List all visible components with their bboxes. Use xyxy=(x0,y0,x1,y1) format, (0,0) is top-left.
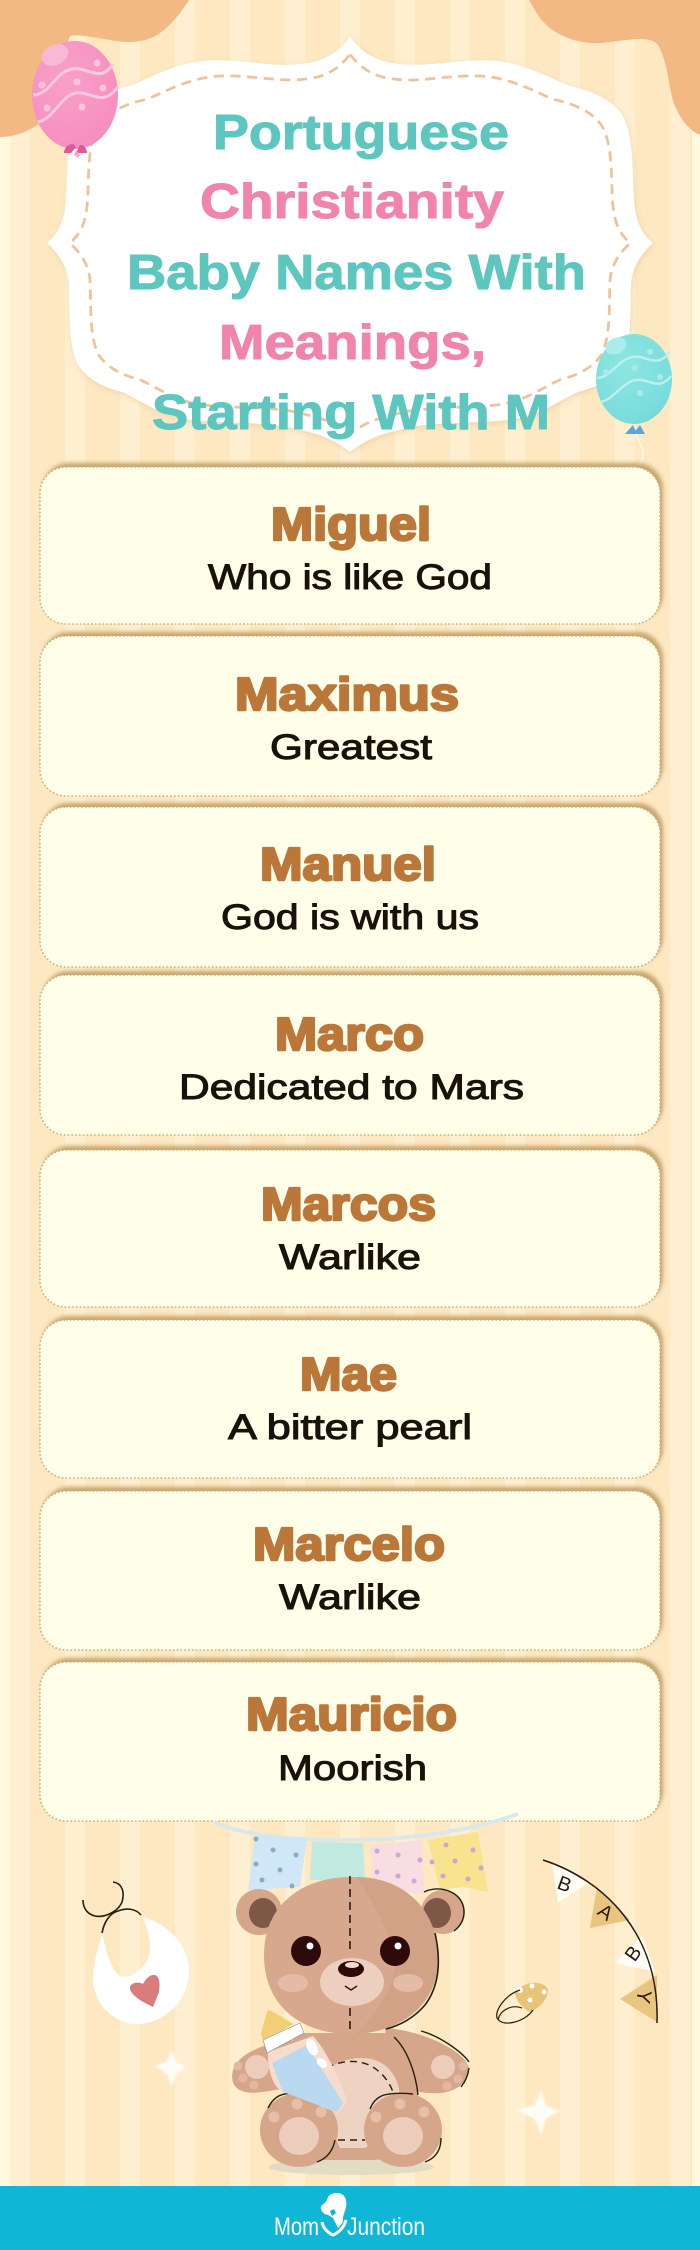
name: Marcos: Marcos xyxy=(261,1178,436,1230)
baby bottle xyxy=(261,2010,347,2113)
curtain: top right xyxy=(529,0,700,135)
name: Manuel: Manuel xyxy=(260,838,436,890)
BABY bunting: A xyxy=(593,1900,617,1926)
meaning: Moorish: Moorish xyxy=(278,1749,427,1788)
meaning: Warlike: Warlike xyxy=(279,1578,421,1617)
title xyxy=(127,106,586,440)
bear head xyxy=(264,1876,438,2034)
bear arms xyxy=(232,2028,469,2093)
bear belly patch xyxy=(320,2058,400,2148)
name: Mae: Mae xyxy=(300,1348,397,1400)
meaning: Dedicated to Mars: Dedicated to Mars xyxy=(179,1068,524,1107)
panel: Maximus xyxy=(40,632,663,796)
title: Portuguese xyxy=(213,106,509,160)
name: Marco: Marco xyxy=(275,1008,424,1060)
BABY bunting: B xyxy=(621,1942,646,1966)
meaning: A bitter pearl: A bitter pearl xyxy=(228,1408,472,1447)
MomJunction logo xyxy=(274,2193,425,2241)
logo figure icon xyxy=(321,2193,346,2235)
bear body xyxy=(286,2033,418,2160)
footer bar xyxy=(0,2186,700,2250)
bunting flags xyxy=(214,1814,518,1895)
icon: pink balloon xyxy=(32,40,118,158)
panel: Manuel xyxy=(40,803,663,967)
meaning: God is with us: God is with us xyxy=(221,898,479,937)
title plaque xyxy=(47,37,654,454)
bear ears xyxy=(236,1889,465,1935)
bear eyes xyxy=(291,1936,410,1966)
BABY bunting xyxy=(543,1860,657,2023)
icon: teal balloon xyxy=(596,334,672,470)
bear feet xyxy=(260,2092,442,2167)
name: Mauricio: Mauricio xyxy=(246,1688,457,1740)
curtain: top left xyxy=(0,0,189,137)
name: Maximus: Maximus xyxy=(235,668,459,720)
icon: star right xyxy=(517,2090,560,2135)
bear nose xyxy=(338,1961,364,1977)
title: Baby Names With xyxy=(127,246,586,300)
BABY bunting: B xyxy=(554,1872,574,1897)
title: Starting With M xyxy=(152,386,550,440)
panel: Marco xyxy=(40,971,663,1135)
panel: Mauricio xyxy=(40,1658,663,1821)
panel: Mae xyxy=(40,1316,663,1478)
BABY bunting: Y xyxy=(631,1988,655,2005)
icon: star left xyxy=(155,2050,186,2087)
meaning: Greatest: Greatest xyxy=(270,728,432,767)
panel: Miguel xyxy=(40,463,663,624)
meaning: Warlike: Warlike xyxy=(279,1238,421,1277)
name: Miguel: Miguel xyxy=(271,498,431,550)
title: Meanings, xyxy=(219,316,486,370)
MomJunction logo: Mom xyxy=(274,2213,319,2241)
MomJunction logo: Junction xyxy=(347,2213,425,2241)
icon: teddy bear xyxy=(232,1876,469,2175)
icon: bib xyxy=(83,1882,189,2024)
icon: safety pin xyxy=(497,1983,548,2023)
panel: Marcos xyxy=(40,1146,663,1307)
meaning: Who is like God: Who is like God xyxy=(208,558,492,597)
panel: Marcelo xyxy=(40,1487,663,1650)
name: Marcelo: Marcelo xyxy=(253,1518,445,1570)
title: Christianity xyxy=(200,175,504,229)
